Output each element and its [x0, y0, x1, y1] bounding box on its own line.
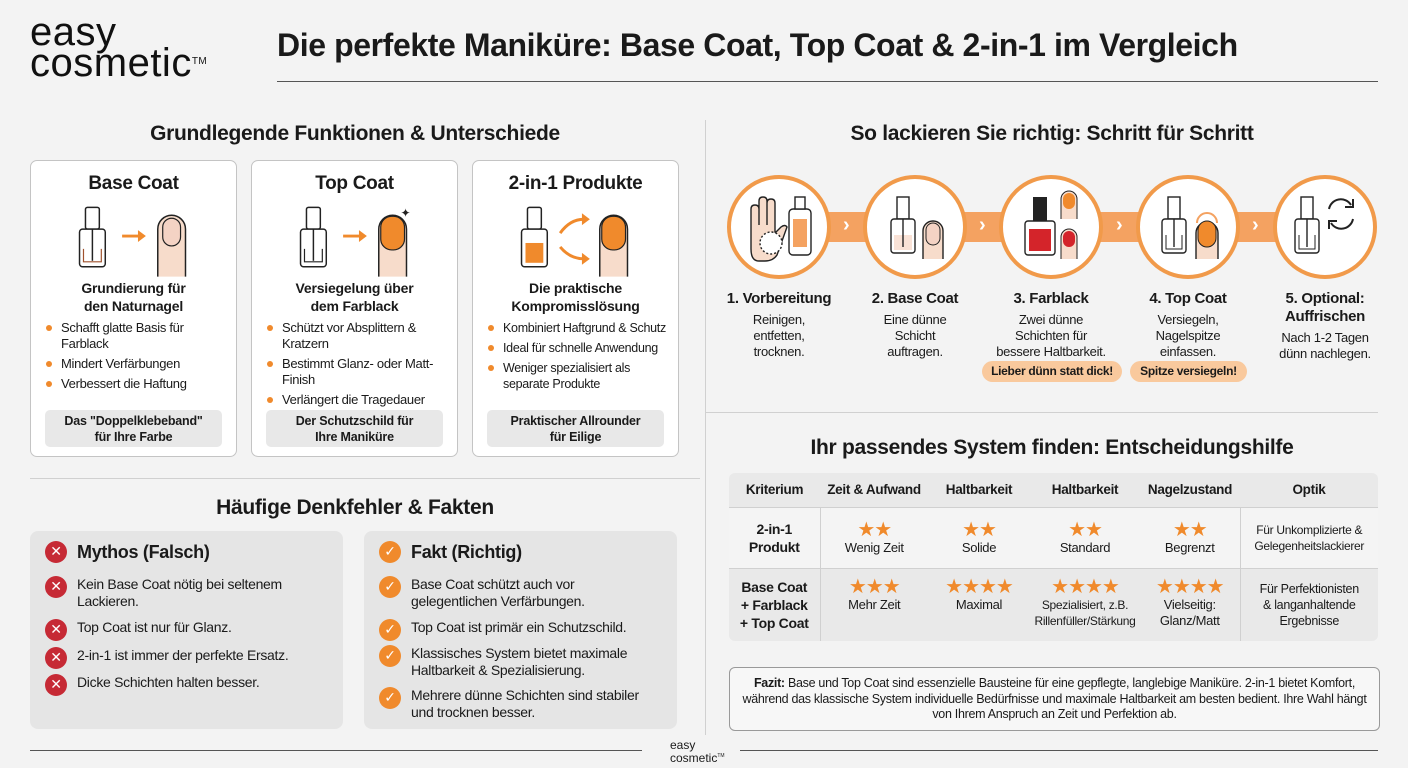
table: decision: ★★ [1068, 519, 1102, 541]
panel: facts [364, 531, 677, 729]
table: decision: Glanz/Matt [1160, 612, 1220, 628]
logo [30, 10, 207, 85]
logo: easy [30, 10, 116, 54]
card: 2-in-1: Kombiniert Haftgrund & Schutz [503, 321, 666, 335]
card: Base Coat: für Ihre Farbe [95, 430, 172, 444]
step 4 text: einfassen. [1160, 344, 1216, 359]
icon: top coat bottle to shiny nail: ✦ [401, 206, 411, 220]
tip pill 2: Spitze versiegeln! [1140, 364, 1237, 378]
table: decision: Maximal [956, 596, 1002, 612]
panel: facts: ✓ [384, 648, 396, 664]
card: Base Coat [30, 160, 237, 457]
step 2 text: auftragen. [887, 344, 943, 359]
text: › [1116, 214, 1123, 236]
panel: facts: Haltbarkeit & Spezialisierung. [411, 662, 585, 678]
step 1 text: 1. Vorbereitung [727, 290, 831, 307]
card: Base Coat: Base Coat [88, 173, 179, 194]
table: decision: Produkt [749, 538, 800, 554]
panel: facts: Klassisches System bietet maximale [411, 645, 627, 661]
table: decision: & langanhaltende [1263, 598, 1356, 612]
card: Top Coat: Ihre Maniküre [315, 430, 394, 444]
step 3 text [996, 290, 1106, 359]
step 3 icon [999, 175, 1103, 279]
card: 2-in-1: Ideal für schnelle Anwendung [503, 341, 658, 355]
callout: Fazit [729, 667, 1380, 731]
icon: top coat bottle to shiny nail [300, 206, 411, 277]
table: decision: Nagelzustand [1148, 482, 1232, 497]
card: 2-in-1: Weniger spezialisiert als separate Produkte [503, 361, 630, 391]
card: Top Coat: Der Schutzschild für [296, 414, 413, 428]
table: decision: Standard [1060, 540, 1110, 555]
step connector band [780, 212, 1325, 242]
panel: facts: ✓ [384, 690, 396, 706]
step 2 text: Schicht [895, 328, 935, 343]
panel: myths: Top Coat ist nur für Glanz. [77, 619, 232, 635]
step 4 text: Versiegeln, [1157, 312, 1219, 327]
table: decision: ★★ [1173, 519, 1207, 541]
card: 2-in-1: Kompromisslösung [511, 298, 640, 314]
table: decision: ★★ [962, 519, 996, 541]
icon: 2-in-1 bottle with split arrows [520, 206, 628, 277]
panel: facts: gelegentlichen Verfärbungen. [411, 593, 585, 609]
panel: myths: ✕ [50, 650, 62, 666]
table: decision: Optik [1292, 482, 1326, 497]
heading: decision: Ihr passendes System finden: Entscheidungshilfe [810, 436, 1294, 459]
panel: myths: ✕ [50, 544, 62, 560]
table: decision: Spezialisiert, z.B. [1042, 598, 1128, 612]
card: Top Coat: dem Farblack [311, 298, 398, 314]
card: 2-in-1 [472, 160, 679, 457]
table: decision: Haltbarkeit [946, 482, 1012, 497]
step 3 text: Zwei dünne [1019, 312, 1083, 327]
step 5 text: 5. Optional: [1286, 290, 1364, 307]
step 3 text: Schichten für [1015, 328, 1087, 343]
panel: myths: Dicke Schichten halten besser. [77, 674, 259, 690]
table: decision: Haltbarkeit [1052, 482, 1118, 497]
icon: base coat bottle to nail [78, 206, 186, 277]
step 2 text: Eine dünne [884, 312, 946, 327]
card: 2-in-1: 2-in-1 Produkte [509, 173, 642, 194]
step 5 text: Auffrischen [1285, 308, 1365, 325]
card: Base Coat: Verbessert die Haftung [61, 376, 187, 391]
card: 2-in-1: Praktischer Allrounder [511, 414, 640, 428]
table: decision: Rillenfüller/Stärkung [1034, 614, 1136, 628]
step 5 text [1279, 290, 1371, 361]
step 1 icon [727, 175, 831, 279]
panel: facts: Base Coat schützt auch vor [411, 576, 574, 592]
callout: Fazit: Fazit: Base und Top Coat sind essenzielle Bausteine für eine gepflegte, langlebige Maniküre. 2-in-1 bietet Komfort, während das klassische System individuelle Bedürfnisse und maximale Haltbarkeit am besten bedient. Ihre Wahl hängt von Ihrem Anspruch an Zeit und Perfektion ab. [742, 676, 1367, 721]
table: decision: ★★★★ [945, 576, 1013, 598]
panel: facts: Mehrere dünne Schichten sind stabiler [411, 687, 639, 703]
table: decision: Begrenzt [1165, 540, 1215, 555]
card: Base Coat: den Naturnagel [84, 298, 183, 314]
text: › [1252, 214, 1259, 236]
step 4 text: Nagelspitze [1156, 328, 1220, 343]
panel: facts: ✓ [384, 544, 396, 560]
table: decision: ★★★★ [1156, 576, 1224, 598]
table: decision: + Top Coat [740, 615, 809, 631]
heading: myths: Häufige Denkfehler & Fakten [216, 496, 494, 519]
step 1 text: trocknen. [754, 344, 804, 359]
tip pill 1: Lieber dünn statt dick! [991, 364, 1113, 378]
card: Base Coat: Grundierung für [81, 280, 186, 296]
panel: facts: Top Coat ist primär ein Schutzschild. [411, 619, 626, 635]
table: decision: Mehr Zeit [848, 596, 900, 612]
panel: myths: Mythos (Falsch) [77, 542, 210, 562]
heading: functions: Grundlegende Funktionen & Unterschiede [150, 122, 560, 145]
card: 2-in-1: für Eilige [550, 430, 601, 444]
step 3 text: 3. Farblack [1013, 290, 1089, 307]
heading: steps: So lackieren Sie richtig: Schritt für Schritt [850, 122, 1254, 145]
step 1 text: Reinigen, [753, 312, 805, 327]
panel: facts: Fakt (Richtig) [411, 542, 522, 562]
card: Base Coat: Mindert Verfärbungen [61, 356, 180, 371]
table: decision: Für Unkomplizierte & [1256, 522, 1362, 536]
step 2 text [872, 290, 958, 359]
table: decision [729, 473, 1378, 641]
panel: myths: ✕ [50, 622, 62, 638]
footer logo: easy [670, 738, 695, 752]
logo: cosmeticTM [30, 41, 207, 85]
panel: facts: ✓ [384, 622, 396, 638]
step 1 text: entfetten, [753, 328, 805, 343]
step 5 text: dünn nachlegen. [1279, 346, 1371, 361]
panel: myths: Kein Base Coat nötig bei seltenem [77, 576, 282, 592]
footer logo: cosmeticTM [670, 751, 725, 765]
panel: myths [30, 531, 343, 729]
card: 2-in-1: Die praktische [529, 280, 622, 296]
table: decision: + Farblack [741, 597, 808, 613]
step 4 text [1149, 290, 1227, 359]
tip pill 1 [982, 361, 1122, 382]
table: decision: ★★ [857, 519, 891, 541]
step 1 text [727, 290, 831, 359]
table: decision: Gelegenheitslackierer [1254, 538, 1364, 552]
text: › [843, 214, 850, 236]
panel: facts: ✓ [384, 578, 396, 594]
panel: myths: ✕ [50, 676, 62, 692]
step 4 text: 4. Top Coat [1149, 290, 1227, 307]
table: decision: Zeit & Aufwand [827, 482, 921, 497]
footer [30, 750, 642, 751]
step 5 icon [1273, 175, 1377, 279]
table: decision: ★★★★ [1051, 576, 1119, 598]
table: decision: Ergebnisse [1279, 614, 1339, 628]
card: Base Coat: Das "Doppelklebeband" [64, 414, 203, 428]
panel: myths: 2-in-1 ist immer der perfekte Ersatz. [77, 647, 288, 663]
panel: facts: und trocknen besser. [411, 704, 535, 720]
card: Base Coat: Schafft glatte Basis für Farblack [61, 320, 184, 351]
card: Top Coat: Bestimmt Glanz- oder Matt-Finish [282, 356, 433, 387]
step 4 icon [1136, 175, 1240, 279]
title: Die perfekte Maniküre: Base Coat, Top Coat & 2-in-1 im Vergleich [277, 27, 1238, 63]
step 3 text: bessere Haltbarkeit. [996, 344, 1106, 359]
card: Top Coat: Schützt vor Absplittern & Kratzern [282, 320, 416, 351]
card: Top Coat: Verlängert die Tragedauer [282, 392, 425, 407]
step 2 icon [863, 175, 967, 279]
card: Top Coat [251, 160, 458, 457]
card: Top Coat: Top Coat [315, 173, 394, 194]
card: Top Coat: Versiegelung über [296, 280, 413, 296]
table: decision: Wenig Zeit [845, 540, 904, 555]
panel: myths: ✕ [50, 578, 62, 594]
step 2 text: 2. Base Coat [872, 290, 958, 307]
table: decision: Kriterium [746, 482, 803, 497]
step 5 text: Nach 1-2 Tagen [1281, 330, 1369, 345]
table: decision: Für Perfektionisten [1260, 582, 1359, 596]
table: decision: 2-in-1 [756, 520, 792, 536]
tip pill 2 [1130, 361, 1247, 382]
panel: myths: Lackieren. [77, 593, 139, 609]
table: decision: Base Coat [741, 579, 807, 595]
text: › [979, 214, 986, 236]
table: decision: Solide [962, 540, 996, 555]
table: decision: Vielseitig: [1164, 596, 1216, 612]
table: decision: ★★★ [849, 576, 900, 598]
footer logo [670, 738, 725, 765]
